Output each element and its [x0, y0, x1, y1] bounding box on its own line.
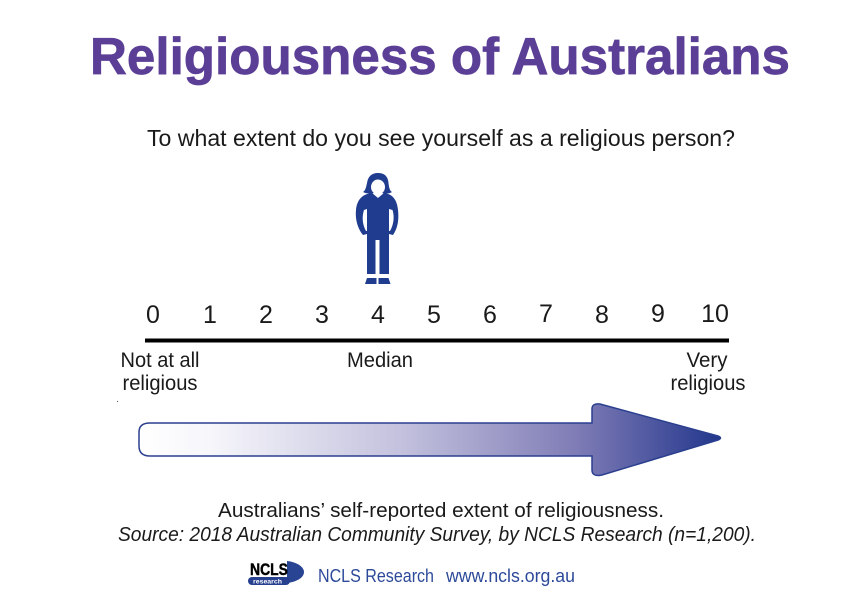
label: very religious: religious [670, 372, 746, 395]
scale numbers 0 to 10: 2 [259, 301, 273, 329]
scale numbers 0 to 10: 8 [595, 301, 609, 329]
label: very religious: Very [686, 349, 728, 372]
scale axis line [145, 338, 729, 342]
footer organisation and website: www.ncls.org.au [445, 566, 575, 586]
footer organisation and website: NCLS Research [318, 566, 434, 586]
scale numbers 0 to 10: 10 [701, 300, 729, 328]
label: median: Median [347, 349, 413, 372]
scale numbers 0 to 10: 9 [651, 300, 665, 328]
scale numbers 0 to 10: 1 [203, 301, 217, 329]
caption: Australians’ self-reported extent of religiousness. [218, 500, 664, 522]
label: not at all religious: Not at all [120, 349, 200, 372]
icon: person at median [356, 173, 398, 284]
title: Religiousness of Australians [90, 28, 790, 86]
NCLS logo [248, 560, 304, 586]
scale numbers 0 to 10: 6 [483, 301, 497, 329]
NCLS logo: research [253, 578, 282, 586]
source: Source: 2018 Australian Community Survey, by NCLS Research (n=1,200). [118, 524, 756, 546]
scale numbers 0 to 10: 5 [427, 301, 441, 329]
stray mark [117, 401, 118, 402]
label: not at all religious: religious [122, 372, 198, 395]
gradient arrow [139, 404, 720, 475]
scale numbers 0 to 10: 7 [539, 300, 553, 328]
scale numbers 0 to 10 [146, 300, 729, 329]
survey question: To what extent do you see yourself as a religious person? [147, 125, 735, 151]
NCLS logo: NCLS [250, 560, 288, 579]
scale numbers 0 to 10: 3 [315, 301, 329, 329]
scale numbers 0 to 10: 4 [371, 301, 385, 329]
label: very religious [670, 349, 746, 395]
scale numbers 0 to 10: 0 [146, 301, 160, 329]
label: not at all religious [120, 349, 200, 395]
footer organisation and website [318, 566, 575, 586]
